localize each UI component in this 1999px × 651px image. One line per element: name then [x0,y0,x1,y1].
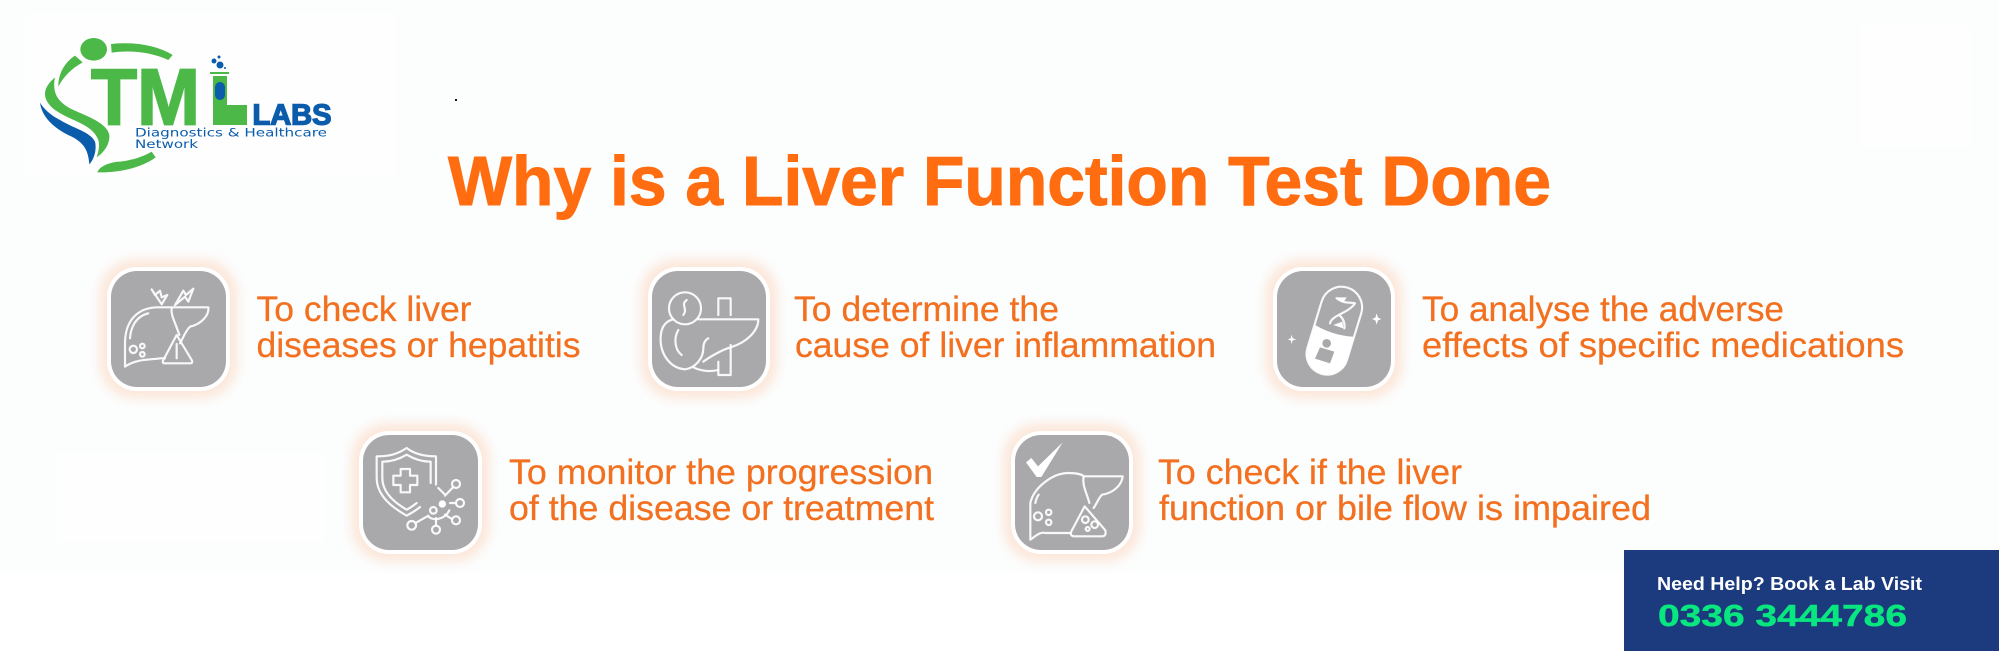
text: adverse effects: effects of specific medications [1422,325,1904,365]
text: determine cause: cause of liver inflammation [795,325,1216,365]
text: liver function or bile flow: To check if the liver [1158,452,1462,492]
logo wordmark: TM [91,52,200,142]
text: liver function or bile flow: function or bile flow is impaired [1159,488,1651,528]
logo wordmark [91,52,332,151]
icon: liver with warning [99,259,238,399]
text: determine cause [794,289,1216,365]
text: monitor progression: of the disease or treatment [509,488,934,528]
logo: TML Labs [40,38,331,172]
text: monitor progression [509,452,934,528]
logo wordmark: L [212,53,248,143]
text: determine cause: To determine the [794,289,1059,329]
logo wordmark: Diagnostics & Healthcare [135,126,327,140]
text: check liver diseases: diseases or hepatitis [256,325,580,365]
logo emblem [40,38,173,172]
text: adverse effects [1422,289,1904,365]
panel: determine cause of inflammation [640,259,1216,399]
icon: liver with check mark [1003,423,1141,562]
logo wordmark: LABS [252,100,332,132]
title: Why is a Liver Function Test Done [448,142,1551,220]
panel: monitor progression [351,423,934,562]
text: check liver diseases: To check liver [256,289,472,329]
callout: book a lab visit [1624,550,1999,651]
callout: book a lab visit: Need Help? Book a Lab Visit [1657,573,1922,594]
text: liver function or bile flow [1158,452,1651,528]
icon: shield and virus [351,423,490,562]
logo wordmark: Network [135,137,198,151]
panel: adverse effects of medications [1265,259,1904,399]
icon: capsule with DNA [1265,259,1403,399]
panel: liver function or bile flow [1003,423,1651,562]
text: adverse effects: To analyse the adverse [1422,289,1784,329]
panel: check liver diseases [99,259,580,399]
callout: book a lab visit: 0336 3444786 [1658,599,1907,633]
text: check liver diseases [256,289,580,365]
text: monitor progression: To monitor the progression [509,452,933,492]
icon: inflamed liver [640,259,778,399]
